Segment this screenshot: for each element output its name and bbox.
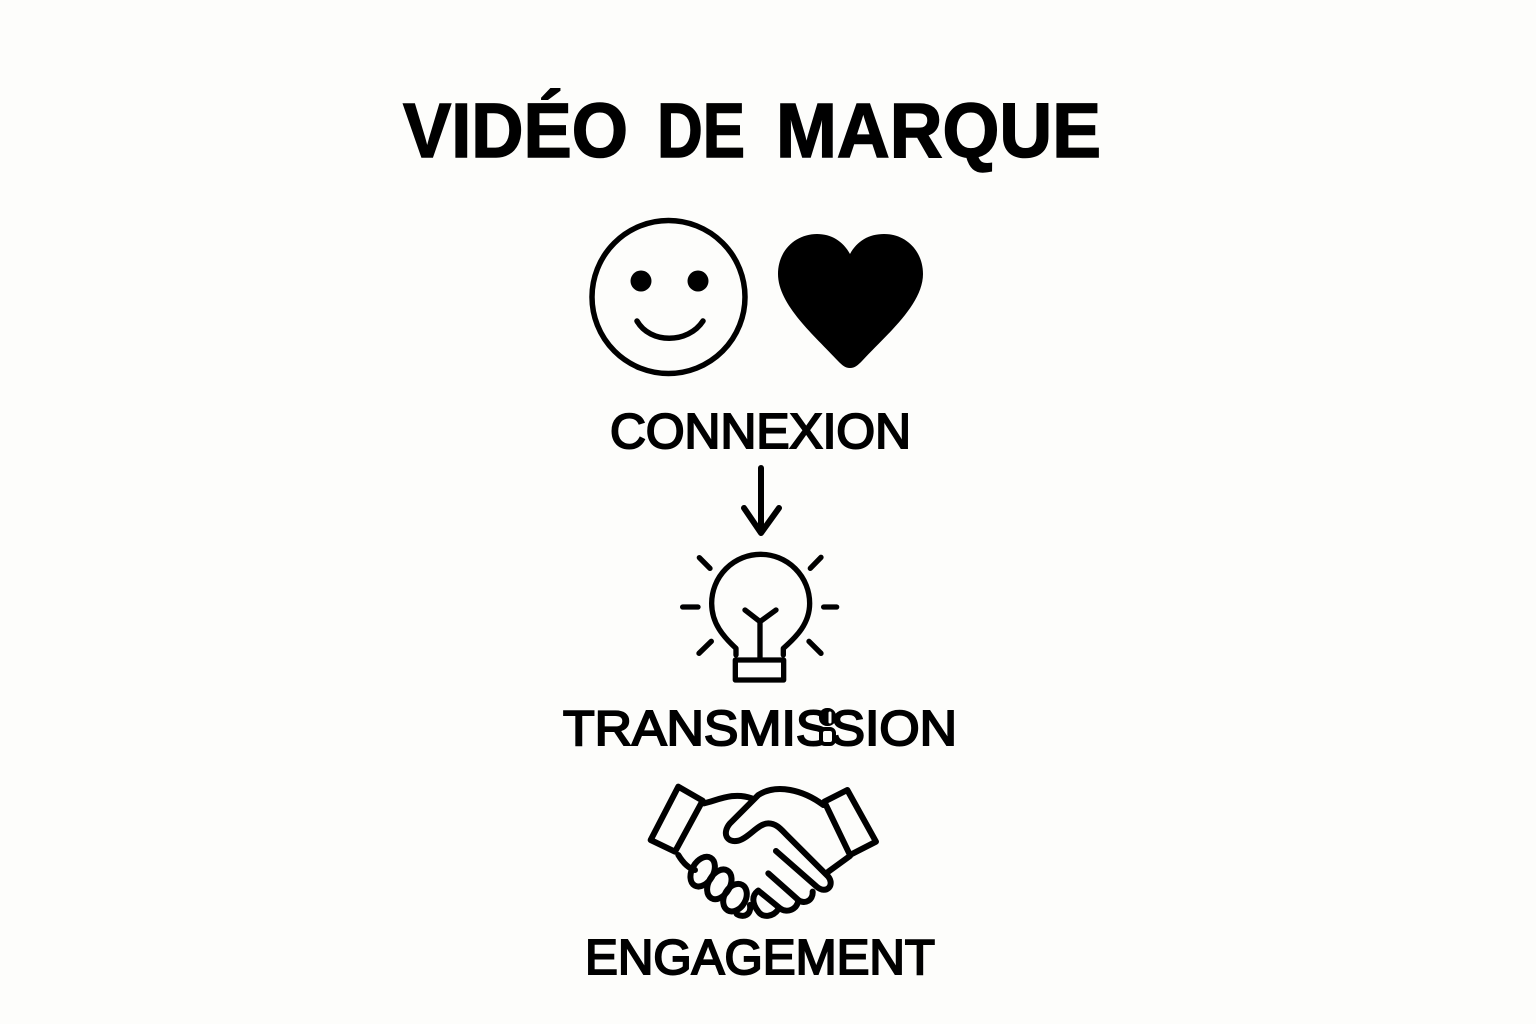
- icon: heart: [778, 234, 923, 368]
- label: connexion: CONNEXION: [610, 405, 911, 459]
- title: [403, 88, 1101, 174]
- title: DE: [657, 88, 745, 174]
- title: VIDÉO: [403, 88, 628, 174]
- label: engagement: ENGAGEMENT: [585, 931, 935, 985]
- icon: light bulb: [683, 554, 837, 680]
- icon: handshake: [651, 787, 876, 916]
- icon: smiley face: [592, 220, 745, 374]
- arrow: connexion to transmission: [744, 468, 779, 533]
- label: transmission: TRANSMISSION: [563, 702, 957, 756]
- title: MARQUE: [776, 88, 1101, 174]
